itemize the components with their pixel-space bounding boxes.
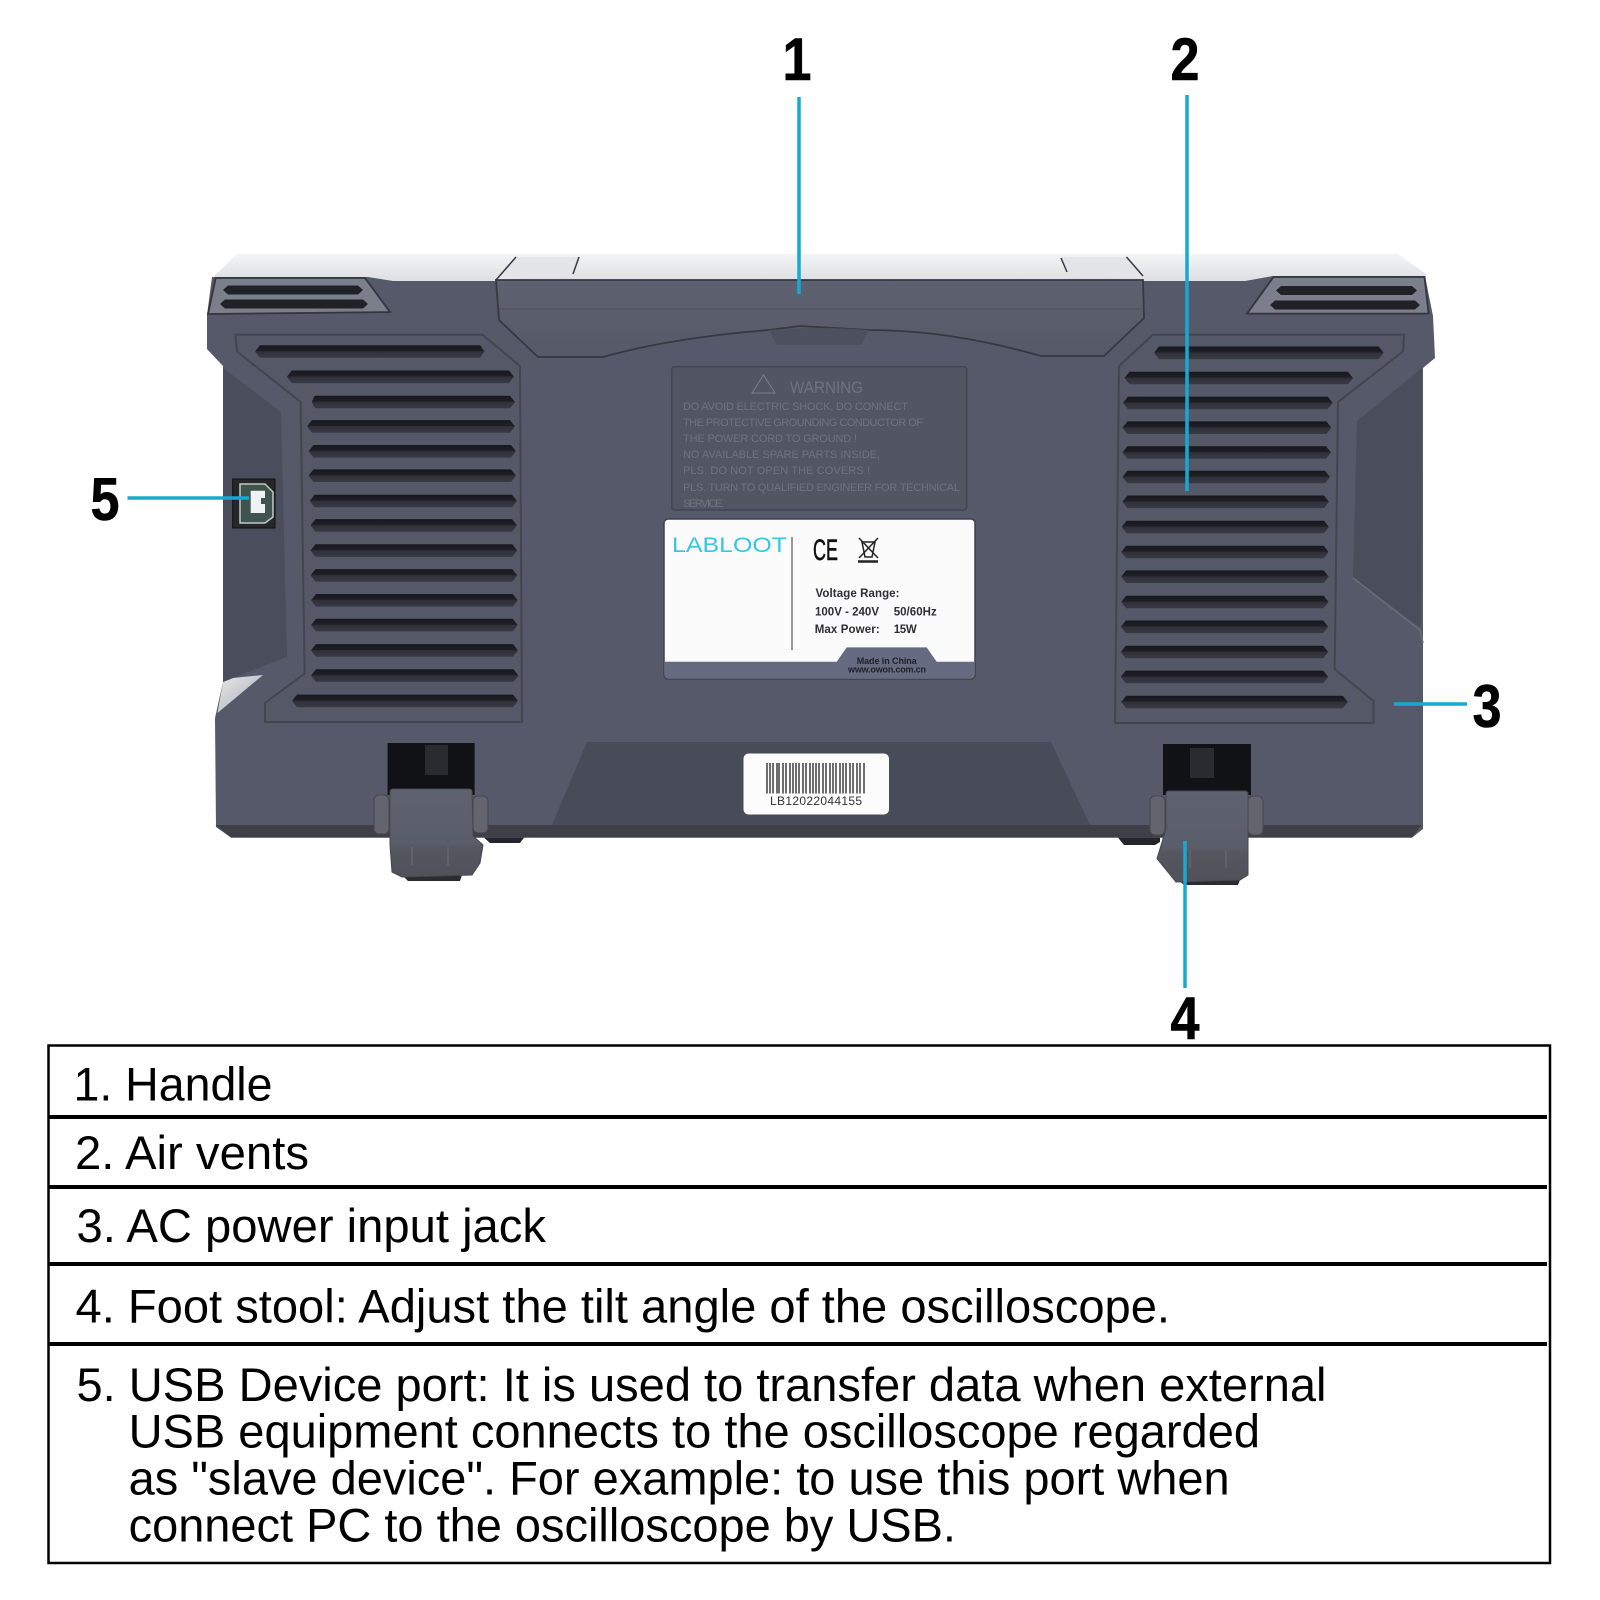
right vent panel [1115,335,1404,723]
row 5 text: connect PC to the oscilloscope by USB. [129,1500,956,1552]
label bottom band [665,647,974,678]
row 3 text: 3. AC power input jack [76,1200,546,1253]
hinge tab left [496,257,579,281]
USB device port [233,479,275,528]
callout number 1: 1 [782,26,812,93]
top-right corner vent [1247,277,1429,314]
white rating label: Made in China [857,656,918,666]
row 1 text: 1. Handle [74,1058,272,1112]
main body silhouette [207,276,1435,838]
right foot stool [1150,744,1263,885]
row 5 text [76,1359,1326,1552]
row 5 text: as "slave device". For example: to use this port when [129,1452,1230,1506]
oscilloscope rear view [207,254,1435,885]
row 5 text: USB equipment connects to the oscilloscope regarded [129,1405,1260,1458]
callout number 5: 5 [90,466,120,533]
leader line 5 [128,496,249,500]
white rating label: Voltage Range: [816,588,900,600]
leader line 1 [797,97,801,294]
embossed warning panel: SERVICE. [683,498,724,510]
leader line 4 [1183,841,1187,988]
CE mark: CE [813,534,838,567]
callout number 3: 3 [1472,673,1502,740]
leader line 3 [1394,702,1467,706]
callout number 4: 4 [1170,985,1200,1052]
embossed warning panel: NO AVAILABLE SPARE PARTS INSIDE, [683,449,880,461]
left foot stool [374,743,488,881]
bottom dark strip of case [216,825,1422,838]
embossed warning panel: WARNING [790,378,863,397]
embossed warning panel [672,367,967,510]
top-left corner vent [208,278,390,314]
embossed warning panel: PLS. DO NOT OPEN THE COVERS ! [683,465,870,477]
white rating label: Max Power: [815,624,880,636]
embossed warning panel: THE POWER CORD TO GROUND ! [683,433,857,445]
barcode sticker [744,754,889,814]
row 5 text: 5. USB Device port: It is used to transfer data when external [76,1359,1326,1412]
embossed warning panel: PLS. TURN TO QUALIFIED ENGINEER FOR TECHNICAL [683,482,960,494]
right side recess [1353,368,1422,627]
embossed warning panel: DO AVOID ELECTRIC SHOCK, DO CONNECT [683,401,908,413]
bottom centre recess [552,742,1090,825]
row 4 text: 4. Foot stool: Adjust the tilt angle of the oscilloscope. [76,1280,1170,1334]
icon: crossed-out bin [858,538,878,562]
white rating label: 15W [894,624,917,636]
white rating label: 50/60Hz [894,607,937,619]
bottom shadow under case [484,838,1160,845]
white rating label [664,519,975,679]
hinge tab right [1061,257,1143,277]
leader line 2 [1185,95,1189,491]
left vent panel [235,335,522,722]
row 2 text: 2. Air vents [75,1127,309,1180]
legend table [48,1046,1550,1563]
white rating label: www.owon.com.cn [847,664,926,674]
left side recess [223,368,287,682]
top light casing band [212,254,1426,284]
embossed warning panel: THE PROTECTIVE GROUNDING CONDUCTOR OF [683,417,923,429]
callout number 2: 2 [1170,26,1200,93]
lower-left light wedge [218,675,263,713]
barcode sticker: LB12022044155 [770,794,862,808]
brand name: LABLOOT [672,534,787,557]
handle [496,280,1144,357]
white rating label: 100V - 240V [815,607,879,619]
